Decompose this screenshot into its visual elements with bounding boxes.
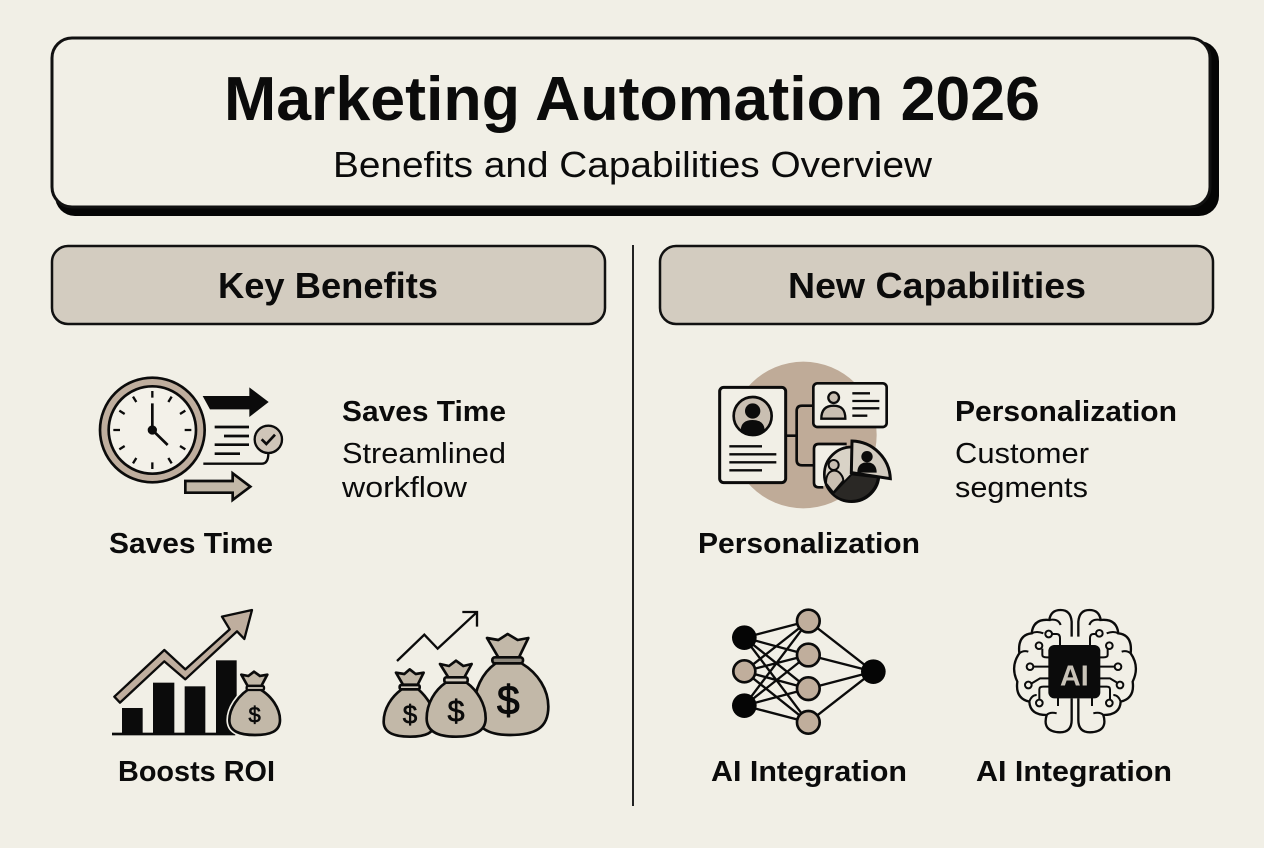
label: personalization: Personalization — [698, 528, 920, 560]
panel heading: new capabilities: New Capabilities — [788, 265, 1086, 306]
text: saves time: Streamlined — [342, 438, 506, 470]
label: ai integration right: AI Integration — [976, 756, 1172, 788]
text: personalization: Customer — [955, 438, 1089, 470]
bag large — [474, 634, 548, 735]
text: personalization: segments — [955, 472, 1088, 504]
bag medium: $ — [447, 694, 465, 728]
bag medium — [427, 661, 486, 737]
label: boosts roi: Boosts ROI — [118, 756, 275, 788]
icon: personalization profiles — [720, 362, 890, 508]
icon: AI brain chip: AI — [1060, 660, 1089, 692]
bag small — [384, 669, 435, 737]
panel heading: key benefits — [52, 246, 605, 324]
label: saves time: Saves Time — [109, 528, 273, 560]
text: personalization — [955, 396, 1177, 504]
text: saves time: Saves Time — [342, 396, 506, 428]
bag large: $ — [497, 677, 520, 723]
icon: growth chart with money bag: $ — [249, 703, 261, 728]
label: ai integration left: AI Integration — [711, 756, 907, 788]
text: personalization: Personalization — [955, 396, 1177, 428]
icon: growth chart with money bag — [112, 610, 280, 735]
title banner — [52, 38, 1219, 216]
panel heading: new capabilities — [660, 246, 1213, 324]
subtitle: Benefits and Capabilities Overview — [333, 144, 933, 185]
text: saves time: workflow — [341, 472, 468, 504]
icon: clock with workflow arrows — [100, 378, 282, 500]
icon: neural network — [732, 610, 886, 734]
icon: three money bags with trend arrow — [384, 612, 548, 737]
bag small: $ — [403, 699, 418, 729]
text: saves time — [341, 396, 506, 504]
title: Marketing Automation 2026 — [224, 65, 1040, 134]
panel heading: key benefits: Key Benefits — [218, 265, 438, 306]
icon: AI brain chip — [1014, 610, 1136, 732]
